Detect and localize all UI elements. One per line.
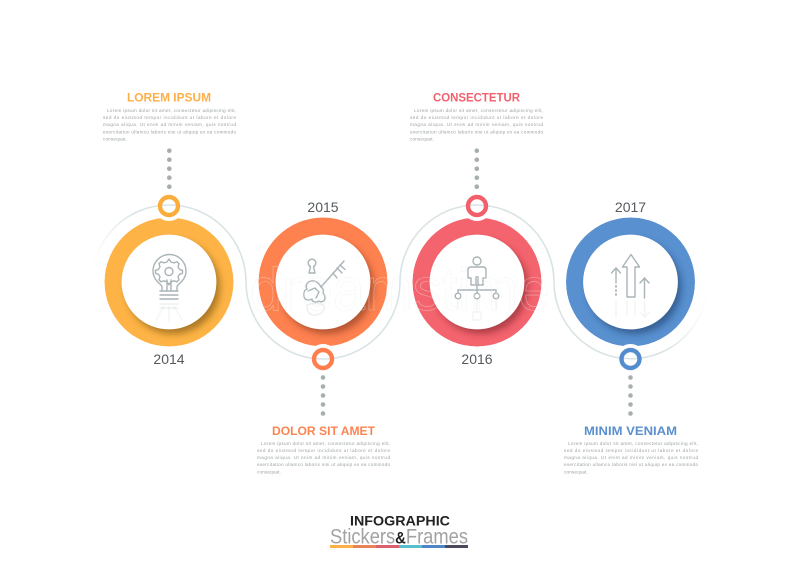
inner disc: orange bbox=[276, 235, 370, 329]
white notch: orange bbox=[308, 344, 338, 374]
logo bbox=[330, 514, 468, 548]
inner disc: yellow bbox=[122, 235, 216, 329]
white notch: red bbox=[462, 191, 492, 221]
body text: consequat. bbox=[103, 136, 127, 142]
watermark: dreamstime bbox=[250, 256, 550, 323]
panel: 2016 bbox=[412, 218, 542, 364]
ring: orange bbox=[258, 218, 388, 346]
body text: Lorem ipsum dolor sit amet, consectetur adipiscing elit, bbox=[414, 108, 543, 113]
connector ring: orange bbox=[314, 350, 332, 368]
connector ring: red bbox=[468, 197, 486, 215]
body text: sed do eiusmod tempor incididunt ut labore et dolore bbox=[410, 115, 543, 120]
year 2016: 2016 bbox=[461, 351, 493, 367]
year 2017: 2017 bbox=[615, 199, 646, 215]
body text bbox=[257, 441, 390, 474]
body text bbox=[103, 108, 236, 142]
body text: exercitation ullamco laboris nisi ut aliquip ex ea commodo bbox=[103, 130, 236, 134]
body text: magna aliqua. Ut enim ad minim veniam, quis nostrud bbox=[257, 455, 390, 460]
body text bbox=[564, 441, 698, 474]
body text: magna aliqua. Ut enim ad minim veniam, quis nostrud bbox=[564, 455, 698, 460]
logo line two: Stickers&Frames bbox=[330, 526, 468, 548]
text block: consectetur bbox=[410, 90, 543, 142]
body text bbox=[410, 108, 543, 142]
inner disc: blue bbox=[583, 235, 678, 329]
body text: exercitation ullamco laboris nisi ut aliquip ex ea commodo bbox=[564, 462, 698, 467]
body text: consequat. bbox=[257, 470, 281, 474]
icon: person over hierarchy bbox=[455, 257, 499, 320]
dotted connector: orange bbox=[321, 375, 325, 416]
heading: LOREM IPSUM bbox=[127, 90, 211, 104]
dotted connector: yellow bbox=[167, 148, 172, 189]
body text: Lorem ipsum dolor sit amet, consectetur adipiscing elit, bbox=[568, 441, 698, 446]
body text: exercitation ullamco laboris nisi ut aliquip ex ea commodo bbox=[257, 462, 390, 467]
panel: 2015 bbox=[258, 202, 388, 346]
heading: MINIM VENIAM bbox=[584, 424, 677, 438]
white notch: blue bbox=[616, 344, 646, 374]
body text: exercitation ullamco laboris nisi ut aliquip ex ea commodo bbox=[410, 130, 543, 134]
dotted connector: blue bbox=[628, 375, 633, 416]
body text: sed do eiusmod tempor incididunt ut labore et dolore bbox=[564, 448, 698, 453]
year 2015: 2015 bbox=[307, 199, 339, 215]
inner disc: red bbox=[430, 235, 524, 329]
logo line one: INFOGRAPHIC bbox=[350, 514, 450, 528]
heading: CONSECTETUR bbox=[433, 90, 520, 104]
body text: consequat. bbox=[410, 136, 434, 142]
body text: magna aliqua. Ut enim ad minim veniam, quis nostrud bbox=[410, 122, 543, 127]
logo colour bar bbox=[330, 545, 468, 548]
year 2014: 2014 bbox=[153, 351, 185, 367]
body text: Lorem ipsum dolor sit amet, consectetur adipiscing elit, bbox=[107, 108, 236, 113]
connector ring: blue bbox=[622, 350, 640, 368]
icon: key and keyhole bbox=[304, 259, 345, 315]
body text: magna aliqua. Ut enim ad minim veniam, quis nostrud bbox=[103, 122, 236, 127]
dotted connector: red bbox=[474, 148, 479, 189]
text block: lorem ipsum bbox=[103, 90, 236, 142]
winding timeline curve bbox=[92, 205, 708, 359]
body text: sed do eiusmod tempor incididunt ut labore et dolore bbox=[103, 115, 236, 120]
heading: DOLOR SIT AMET bbox=[272, 424, 376, 438]
icon: growth arrows bbox=[612, 254, 649, 317]
connector ring: yellow bbox=[160, 197, 178, 215]
panel: 2017 bbox=[566, 202, 695, 346]
icon: light bulb with gear bbox=[153, 254, 186, 322]
body text: Lorem ipsum dolor sit amet, consectetur adipiscing elit, bbox=[261, 441, 390, 446]
ring: blue bbox=[566, 218, 695, 346]
ring: yellow bbox=[104, 218, 234, 346]
white notch: yellow bbox=[154, 191, 184, 221]
panel: 2014 bbox=[104, 218, 234, 364]
text block: minim veniam bbox=[564, 424, 698, 474]
ring: red bbox=[412, 218, 542, 346]
body text: consequat. bbox=[564, 470, 588, 474]
text block: dolor sit amet bbox=[257, 424, 390, 474]
body text: sed do eiusmod tempor incididunt ut labore et dolore bbox=[257, 448, 390, 453]
